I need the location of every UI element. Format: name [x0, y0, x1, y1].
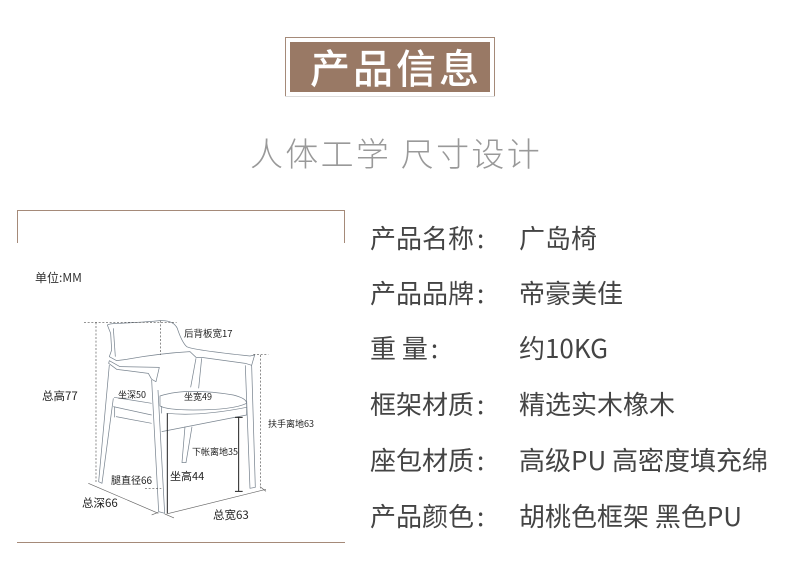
spec: brand	[370, 274, 623, 311]
unit label: 单位:MM	[35, 269, 82, 286]
dimension labels: 坐高44	[170, 468, 204, 484]
spec: weight: 重 量:	[370, 329, 438, 366]
panel frame	[18, 210, 344, 243]
dimension lines	[84, 321, 268, 488]
spec: brand: 产品品牌:	[370, 274, 484, 311]
spec: name: 产品名称:	[370, 219, 484, 256]
title badge: 产品信息: 产品信息	[310, 37, 482, 95]
chair seat	[160, 391, 247, 410]
chair back and arms	[107, 321, 255, 365]
spec: name	[370, 219, 597, 256]
spec: colour: 产品颜色:	[370, 497, 484, 534]
spec: weight	[370, 329, 608, 366]
spec: seat material	[370, 441, 768, 478]
spec: brand: 帝豪美佳	[519, 274, 623, 311]
spec: name: 广岛椅	[519, 219, 597, 256]
dimension labels: 坐深50	[118, 388, 146, 401]
spec: seat material: 高级PU 高密度填充绵	[519, 441, 768, 478]
spec: frame material: 框架材质:	[370, 385, 484, 422]
dimension labels: 下帐离地35	[192, 445, 238, 458]
spec: seat material: 座包材质:	[370, 441, 484, 478]
dimension labels: 总高77	[42, 388, 78, 404]
spec: colour: 胡桃色框架 黑色PU	[519, 497, 742, 534]
panel: product specifications	[370, 219, 768, 534]
dimension labels: 坐宽49	[184, 390, 212, 403]
dimension labels	[42, 326, 314, 523]
dimension labels: 总深66	[82, 495, 118, 511]
dimension labels: 后背板宽17	[184, 326, 233, 340]
spec: colour	[370, 497, 742, 534]
spec: frame material: 精选实木橡木	[519, 385, 675, 422]
dimension labels: 腿直径66	[111, 472, 153, 487]
dimension labels: 总宽63	[213, 507, 249, 523]
spec: weight: 约10KG	[519, 329, 608, 366]
subtitle: 人体工学 尺寸设计	[250, 128, 542, 176]
spec: frame material	[370, 385, 675, 422]
chair drawing	[84, 321, 268, 518]
chair legs	[99, 365, 113, 483]
panel: chair dimension diagram	[17, 210, 345, 542]
dimension labels: 扶手离地63	[268, 417, 314, 430]
